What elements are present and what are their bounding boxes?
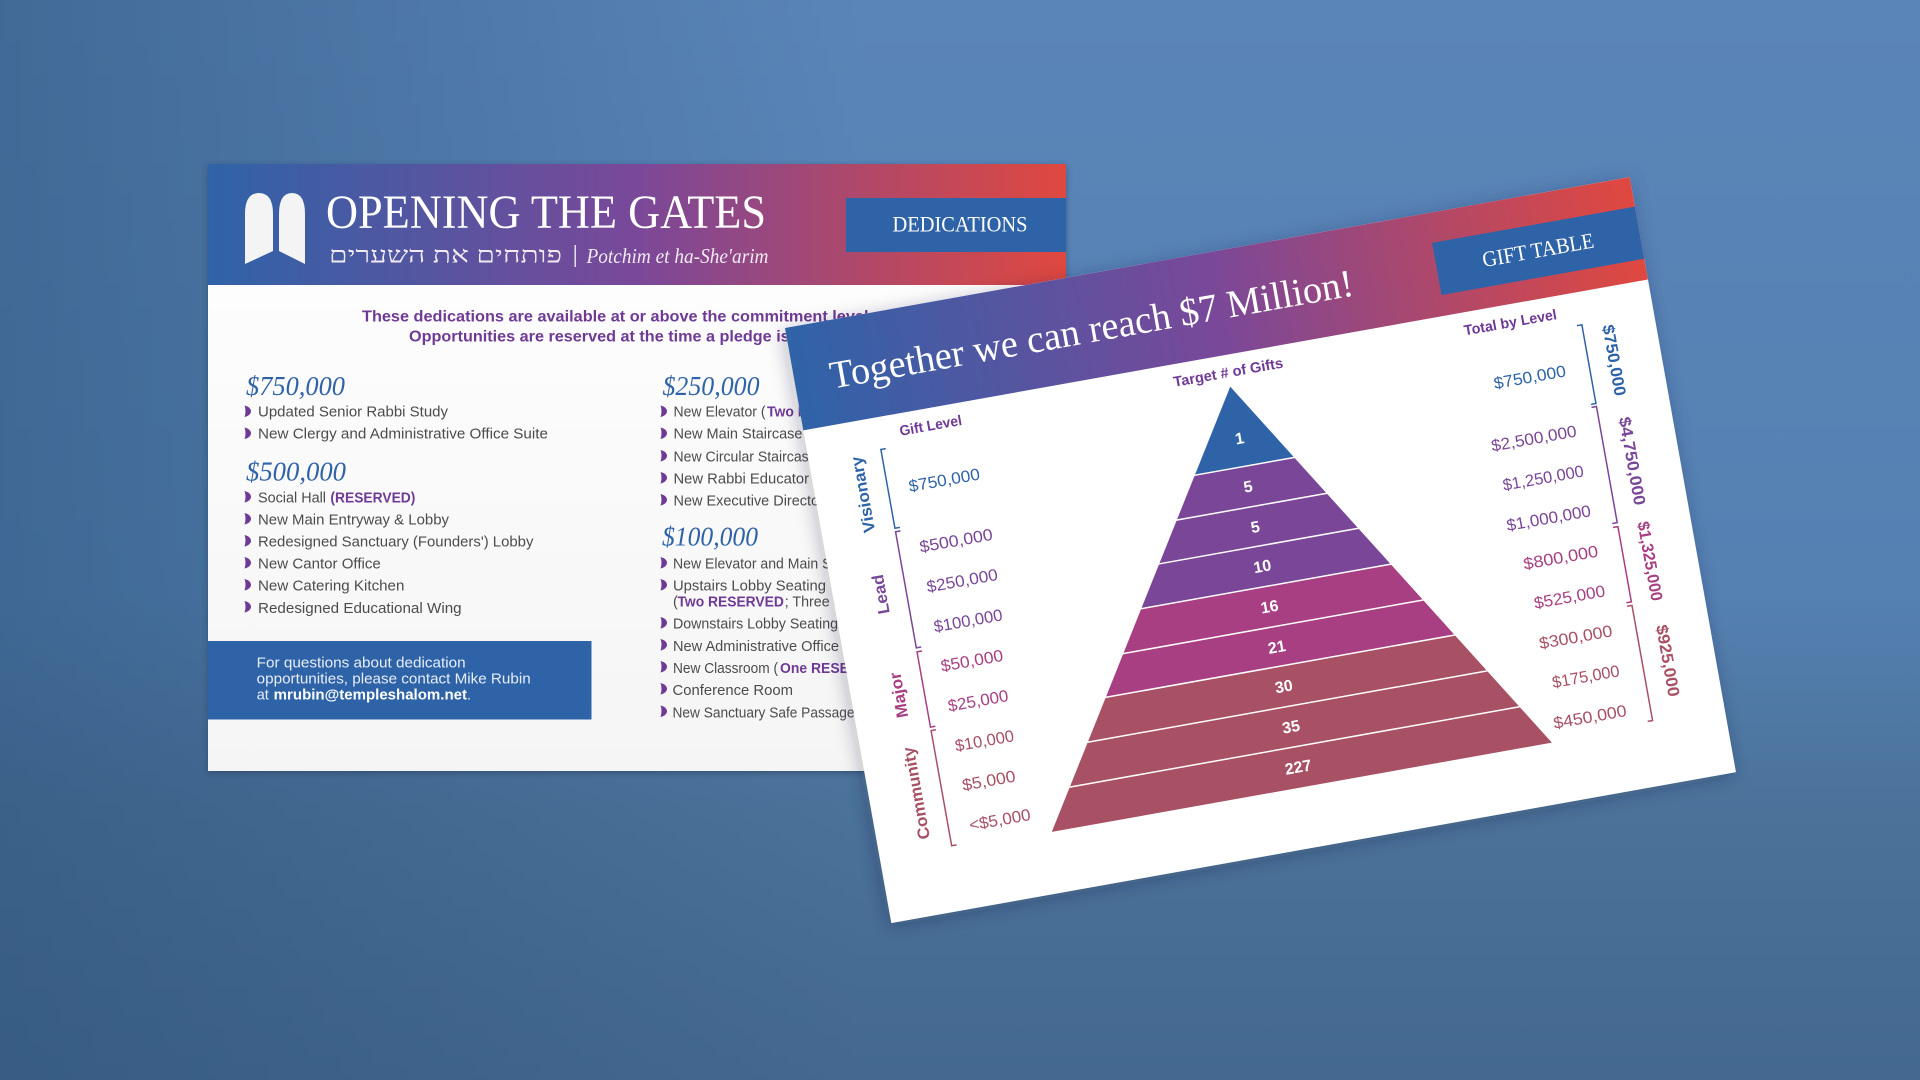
chart: gift pyramid: 5 (1250, 519, 1261, 537)
list: $250,000 dedications: Two RESERVED) (767, 405, 879, 421)
contact callout: mrubin@templeshalom.net (274, 687, 467, 703)
list: $250,000 dedications (660, 405, 879, 510)
chart: gift pyramid: 21 (1267, 638, 1287, 658)
list: $500,000 dedications: New Catering Kitchen (258, 579, 404, 595)
gift level values: $50,000 (939, 647, 1005, 676)
list: $100,000 dedications: New Administrative Office (673, 639, 839, 655)
list: $100,000 dedications: Upstairs Lobby Seating (673, 579, 826, 595)
list: $500,000 dedications (244, 490, 534, 617)
hebrew subtitle: פותחים את השערים (329, 243, 562, 268)
heading: $100,000: $100,000 (662, 522, 758, 552)
chart: gift pyramid: 1 (1234, 430, 1246, 448)
header band (208, 164, 1066, 285)
list: $500,000 dedications: New Cantor Office (258, 557, 381, 573)
list: $500,000 dedications: (RESERVED) (330, 490, 416, 506)
chart: gift pyramid: 5 (1242, 478, 1254, 497)
intro text: Opportunities are reserved at the time a pledge is made. (409, 329, 841, 346)
list: $100,000 dedications: One RESERVED) (780, 661, 892, 677)
list: $500,000 dedications: Social Hall (258, 490, 326, 506)
total by level values: $2,500,000 (1490, 423, 1578, 455)
list: $250,000 dedications: New Rabbi Educator Office (674, 471, 852, 487)
contact callout (208, 641, 592, 720)
list: $500,000 dedications: Redesigned Sanctuary (Founders') Lobby (258, 534, 534, 550)
gift level values: $250,000 (925, 566, 999, 596)
title: OPENING THE GATES (326, 186, 766, 239)
list: $100,000 dedications: New Elevator and Main Stairs (673, 557, 858, 573)
gift level values: $100,000 (932, 606, 1004, 636)
heading: $250,000: $250,000 (662, 371, 760, 401)
total by level values: $800,000 (1522, 543, 1600, 574)
list: $100,000 dedications (660, 557, 895, 721)
column heading: total by level: Total by Level (1463, 307, 1558, 339)
chart: gift pyramid: 16 (1259, 598, 1280, 618)
list: $250,000 dedications: New Elevator ( (674, 405, 766, 421)
total by level values: $750,000 (1492, 362, 1567, 393)
tag: gift table: GIFT TABLE (1480, 228, 1596, 272)
list: $100,000 dedications: New Classroom ( (673, 661, 778, 677)
contact callout: at (257, 687, 269, 703)
subtotals by category: $750,000 (1598, 323, 1629, 397)
list: $100,000 dedications: Downstairs Lobby Seating (673, 617, 838, 633)
total by level values: $300,000 (1538, 622, 1614, 653)
category labels: Lead (869, 573, 894, 615)
gift level values: $25,000 (947, 687, 1010, 716)
gift level values: $750,000 (907, 466, 981, 496)
list: $250,000 dedications: New Circular Staircase (674, 449, 816, 465)
list: $250,000 dedications: New Main Staircase (674, 427, 802, 443)
subtotals by category: $4,750,000 (1615, 416, 1648, 507)
gift level values (907, 465, 1044, 835)
gift level values: <$5,000 (968, 806, 1032, 835)
total by level values: $175,000 (1551, 662, 1621, 692)
gift level values: $10,000 (954, 727, 1015, 755)
list: $500,000 dedications: New Main Entryway & Lobby (258, 512, 450, 528)
intro text (362, 309, 873, 346)
contact callout: opportunities, please contact Mike Rubin (257, 671, 531, 687)
total by level values: $1,250,000 (1501, 463, 1585, 495)
panel: gift table card (785, 177, 1736, 923)
header band (785, 177, 1648, 430)
list: $500,000 dedications: Redesigned Educational Wing (258, 601, 462, 617)
tag: dedications: DEDICATIONS (892, 212, 1028, 237)
list: $750,000 dedications: New Clergy and Administrative Office Suite (258, 427, 548, 443)
total by level values: $1,000,000 (1505, 502, 1592, 535)
subtotals by category (1598, 323, 1683, 698)
contact callout: For questions about dedication (257, 655, 466, 671)
subtotals by category: $925,000 (1652, 623, 1683, 698)
transliteration subtitle: Potchim et ha-She'arim (586, 244, 768, 268)
total by level values: $450,000 (1552, 702, 1628, 733)
list: $250,000 dedications: New Executive Director Office (674, 494, 866, 510)
total by level values: $525,000 (1533, 582, 1607, 613)
category brackets: left (881, 449, 957, 846)
list: $750,000 dedications (244, 405, 548, 443)
heading: $750,000: $750,000 (246, 371, 345, 401)
list: $100,000 dedications: Conference Room (672, 683, 793, 699)
gift level values: $500,000 (918, 526, 994, 557)
total by level values (1479, 362, 1628, 735)
list: $750,000 dedications: Updated Senior Rabbi Study (258, 405, 449, 421)
list: $100,000 dedications: Two RESERVED (678, 595, 784, 611)
column heading: target gifts: Target # of Gifts (1172, 356, 1284, 391)
icon: gates logo (245, 193, 305, 264)
contact callout: . (467, 687, 471, 703)
chart: gift pyramid: 10 (1252, 557, 1273, 577)
category labels (848, 454, 934, 841)
category labels: Community (900, 745, 934, 841)
category brackets: right (1577, 325, 1653, 721)
subtotals by category: $1,325,000 (1634, 520, 1665, 602)
list: $100,000 dedications: ; Three available) (785, 595, 895, 611)
chart: gift pyramid: 30 (1274, 677, 1294, 697)
list: $100,000 dedications: New Sanctuary Safe Passage (672, 705, 854, 721)
headline: Together we can reach $7 Million! (826, 262, 1357, 397)
chart: gift pyramid: 227 (1284, 757, 1313, 779)
category labels: Visionary (848, 454, 879, 534)
chart: gift pyramid (980, 342, 1552, 832)
category labels: Major (886, 670, 912, 719)
heading: $500,000: $500,000 (246, 457, 346, 487)
gift level values: $5,000 (961, 768, 1017, 795)
tag: gift table (1432, 207, 1644, 295)
intro text: These dedications are available at or above the commitment level. (362, 309, 873, 326)
chart: gift pyramid: 35 (1281, 718, 1302, 738)
list: $100,000 dedications: ( (673, 595, 678, 611)
tag: dedications (846, 198, 1066, 252)
column heading: gift level: Gift Level (898, 413, 963, 440)
panel: dedications card (208, 164, 1066, 771)
